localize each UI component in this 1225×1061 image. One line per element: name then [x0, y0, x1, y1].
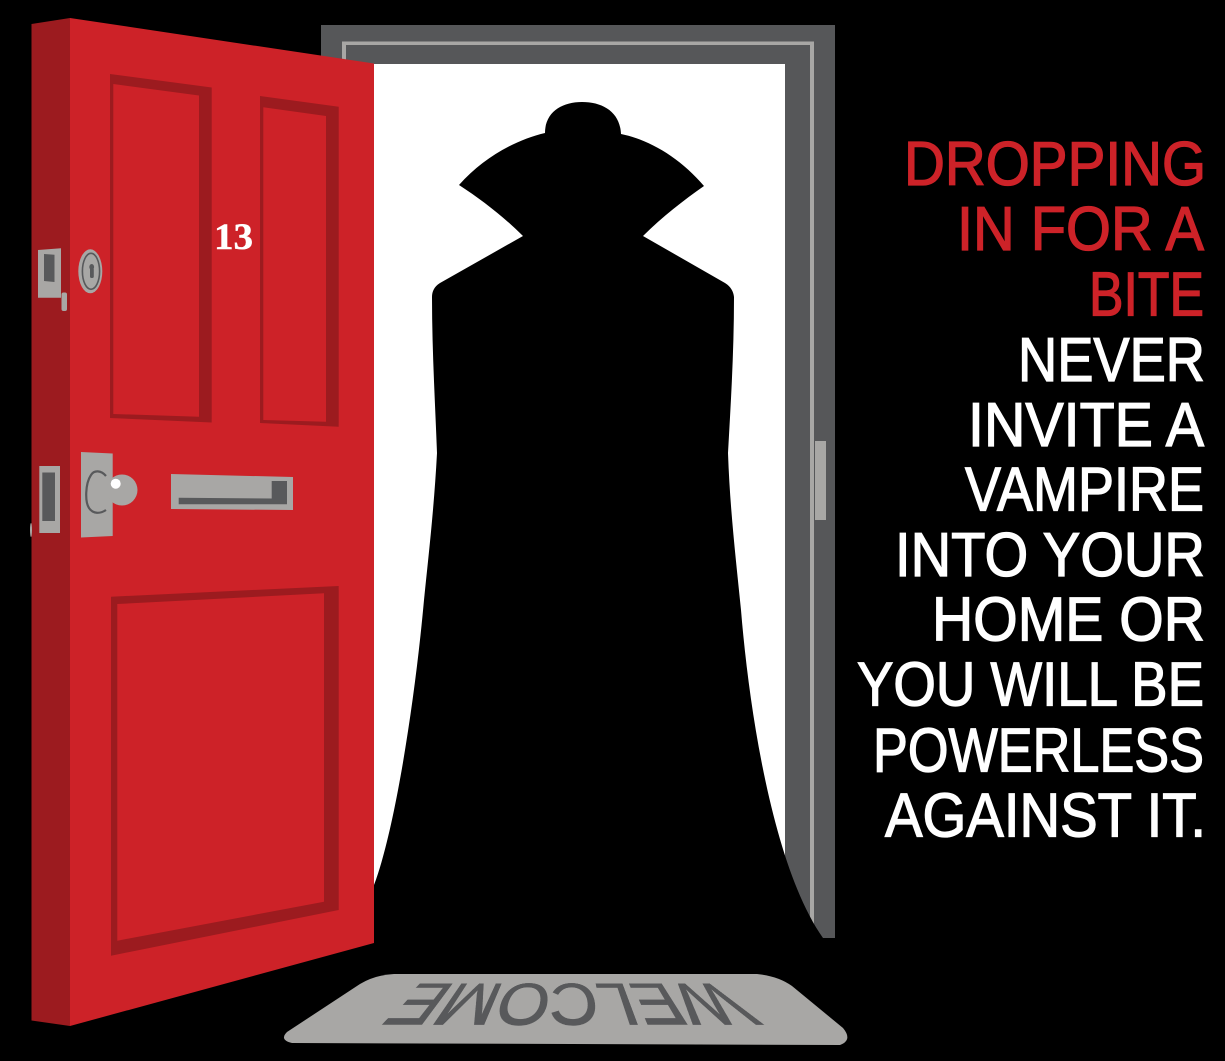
welcome mat [284, 974, 848, 1045]
frame hinge plate [815, 441, 826, 520]
message [857, 326, 1206, 851]
upside-down welcome lettering: WELCOME [362, 974, 780, 1041]
vampire silhouette [360, 102, 836, 945]
door frame [321, 25, 835, 944]
upper left panel [110, 74, 212, 422]
upper right panel [260, 96, 339, 427]
door knob [81, 452, 138, 538]
lower latch plate [30, 466, 60, 537]
house number: 13 [214, 217, 253, 258]
frame inset line [342, 42, 814, 938]
headline [904, 130, 1206, 330]
headline: IN FOR A [957, 195, 1205, 264]
open red door [30, 18, 374, 1026]
headline and message [857, 130, 1206, 851]
message: HOME OR [932, 586, 1205, 655]
bright open doorway [360, 64, 785, 944]
message: INVITE A [968, 391, 1205, 460]
keyhole escutcheon [78, 249, 102, 293]
door edge [32, 18, 70, 1026]
upper latch plate [38, 248, 67, 311]
headline: DROPPING [904, 130, 1206, 199]
door face [70, 18, 374, 1026]
headline: BITE [1089, 261, 1204, 330]
letter slot [171, 474, 293, 510]
lower panel [111, 586, 339, 956]
